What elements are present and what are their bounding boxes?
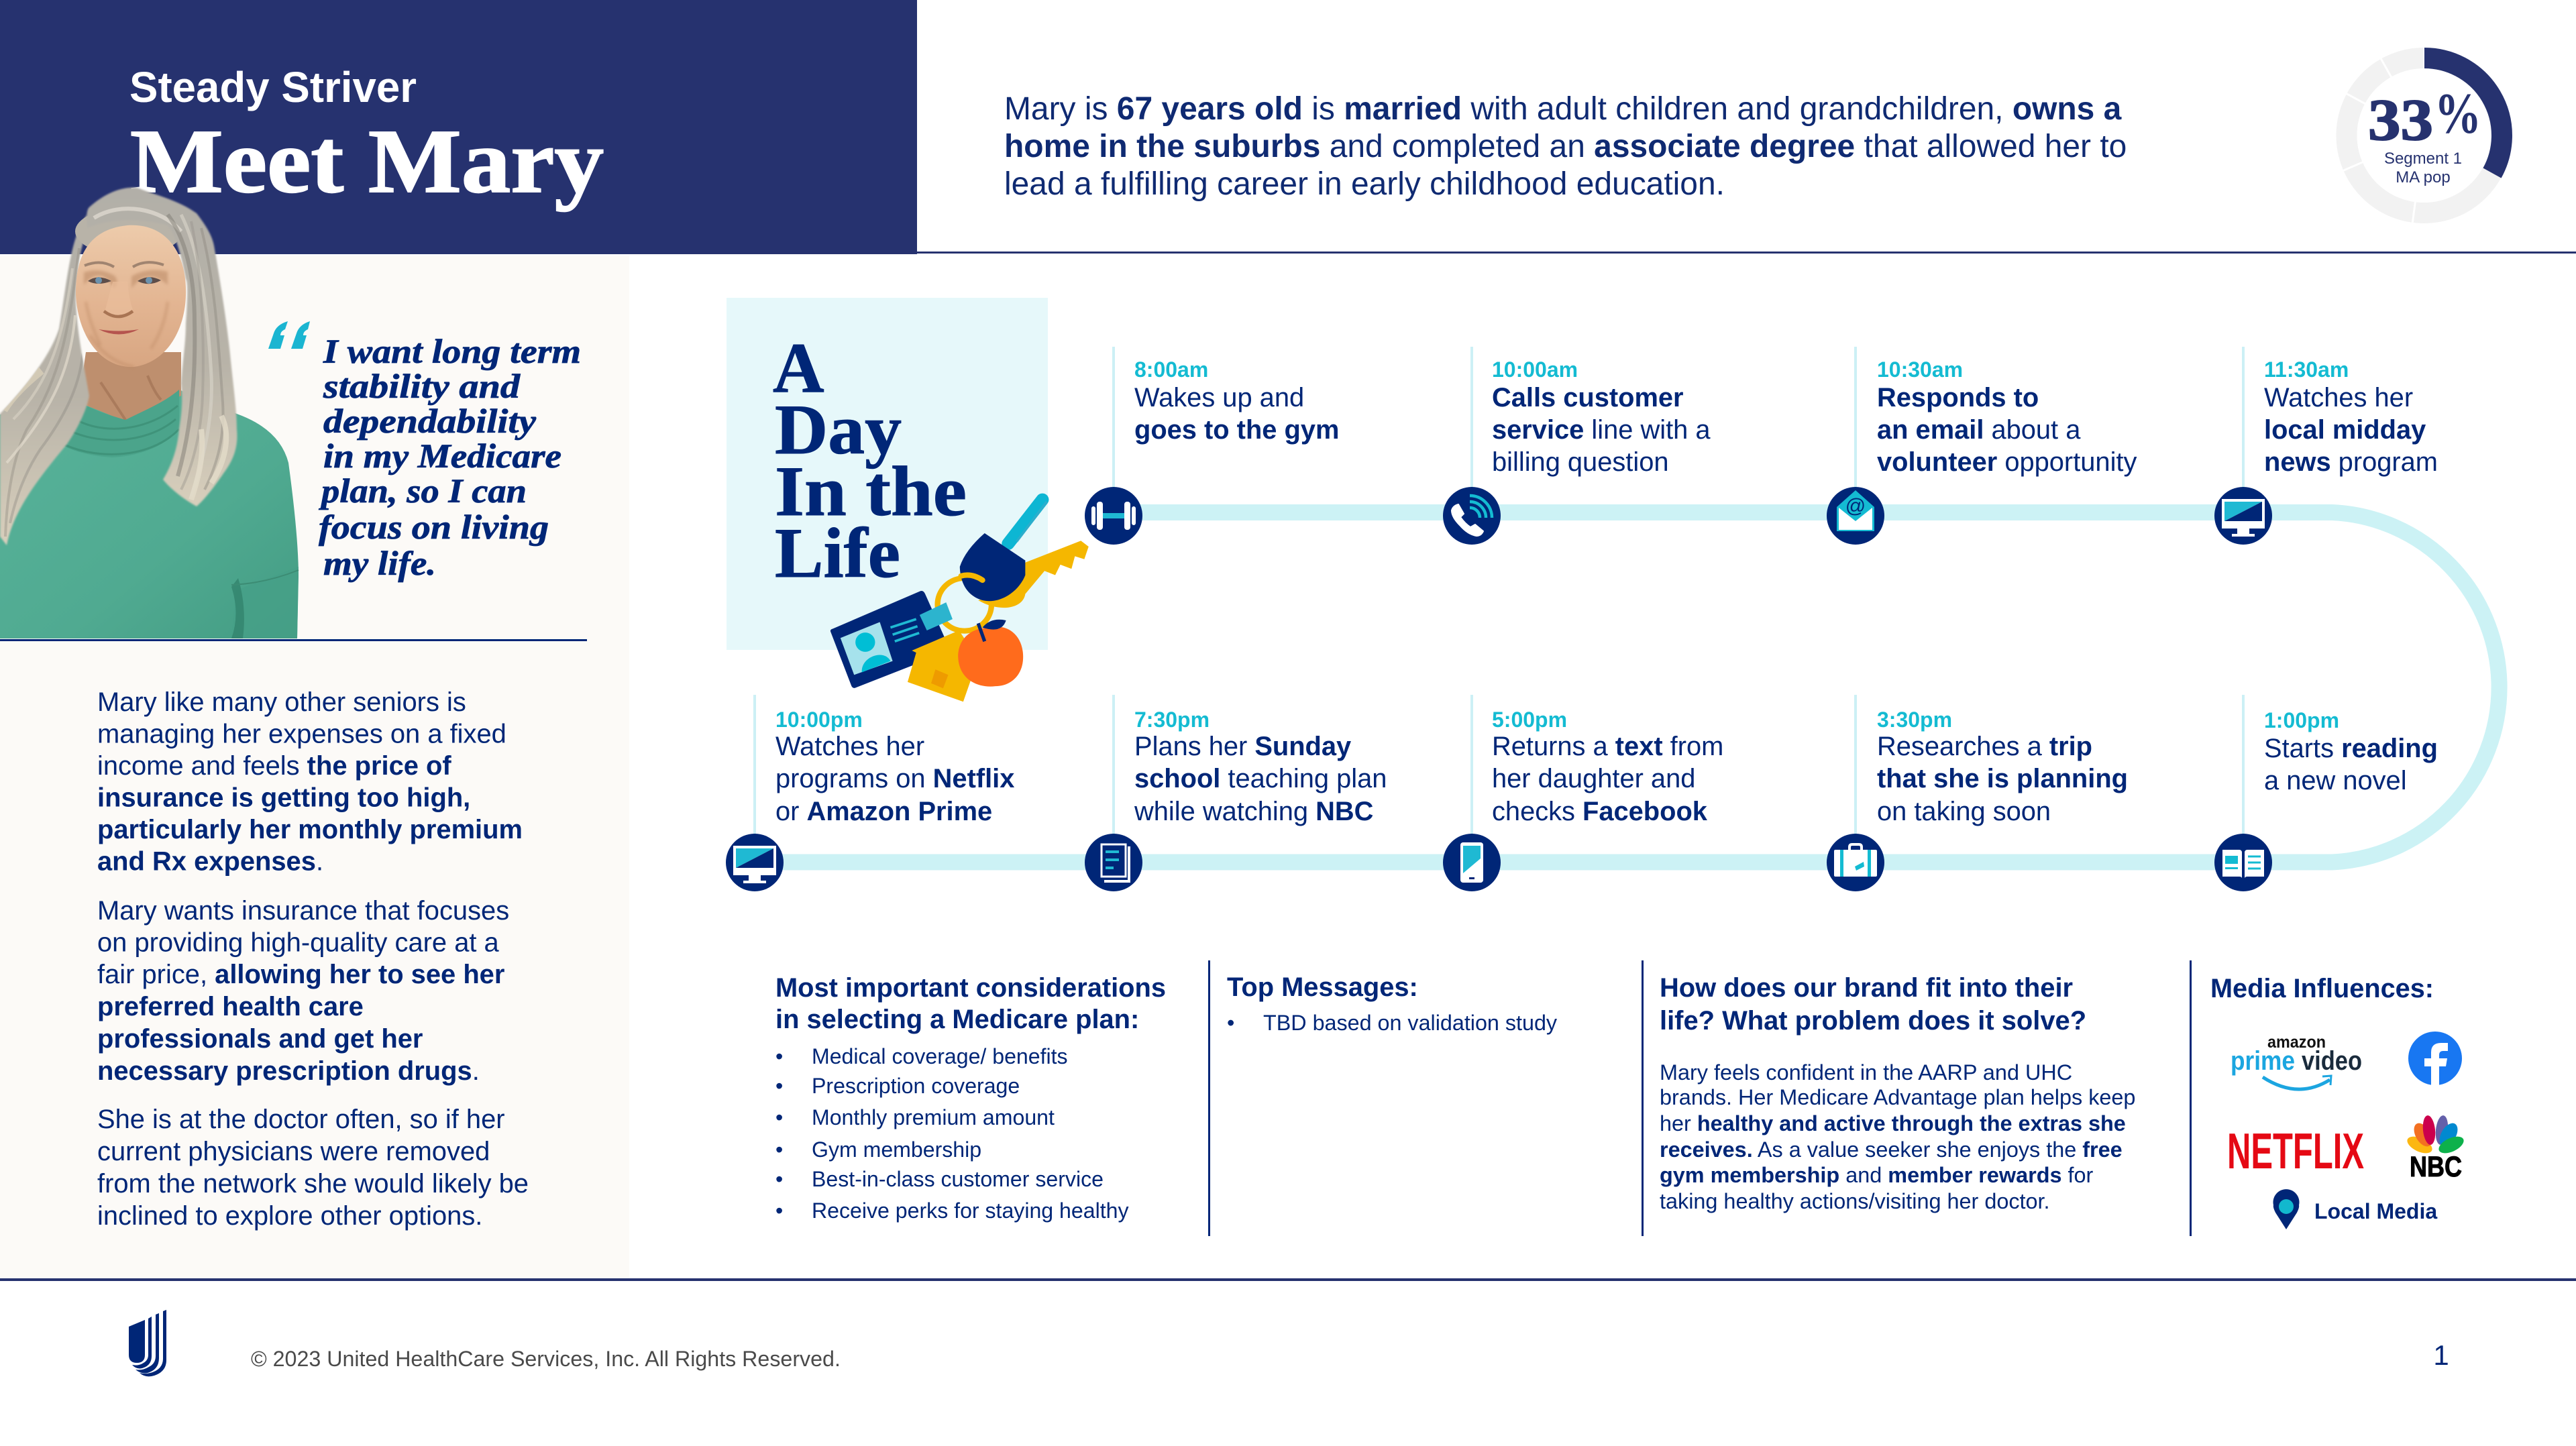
persona description: income and feels the price of xyxy=(97,751,451,781)
icon: email: @ xyxy=(1845,495,1866,517)
timeline entry: 10:30am: 10:30am xyxy=(1877,357,1963,382)
logo: amazon prime video: amazon xyxy=(2267,1033,2326,1052)
heading: Most important considerations xyxy=(775,973,1166,1003)
quote marks xyxy=(268,321,310,349)
bullet list: • xyxy=(775,1137,783,1162)
body copy: gym membership and member rewards for xyxy=(1660,1163,2094,1187)
bullet list: • xyxy=(775,1105,783,1129)
panel: brand fit xyxy=(1642,960,2135,1236)
timeline entry: 7:30pm: Plans her Sunday xyxy=(1134,732,1351,761)
portrait of Mary xyxy=(0,188,299,638)
bullet list: Best-in-class customer service xyxy=(812,1167,1104,1191)
timeline entry: 5:00pm: Returns a text from xyxy=(1492,732,1723,761)
logo: amazon prime video: video xyxy=(2302,1046,2362,1076)
section title: a day in the life xyxy=(773,329,967,592)
timeline entry: 1:00pm xyxy=(2214,708,2438,891)
timeline connector lines xyxy=(755,347,2243,835)
timeline entry: 10:00am: Calls customer xyxy=(1492,383,1684,412)
bullet list: • xyxy=(775,1044,783,1068)
body copy xyxy=(1660,1060,2135,1213)
icon: documents xyxy=(1085,834,1142,891)
message bullet: TBD based on validation study xyxy=(1263,1011,1558,1035)
timeline entry: 10:00pm: programs on Netflix xyxy=(775,764,1014,793)
timeline entry: 1:00pm: Starts reading xyxy=(2264,734,2438,763)
icon: monitor xyxy=(2214,487,2272,545)
timeline entry: 1:00pm: a new novel xyxy=(2264,766,2407,795)
timeline entry: 7:30pm xyxy=(1085,708,1387,891)
timeline entry: 10:00pm xyxy=(726,708,1014,891)
timeline entry: 3:30pm: Researches a trip xyxy=(1877,732,2092,761)
persona description: and Rx expenses. xyxy=(97,846,323,876)
timeline entry: 3:30pm: that she is planning xyxy=(1877,764,2128,793)
timeline entry: 8:00am: goes to the gym xyxy=(1134,415,1339,445)
logo: nbc: NBC xyxy=(2410,1151,2462,1183)
local media xyxy=(2273,1189,2437,1229)
intro paragraph: Mary is 67 years old is married with adult children and grandchildren, owns a xyxy=(1004,91,2122,127)
heading xyxy=(1660,973,2086,1036)
quote text: in my Medicare xyxy=(323,438,561,476)
bullet list: Prescription coverage xyxy=(812,1074,1020,1098)
heading: in selecting a Medicare plan: xyxy=(775,1005,1139,1034)
timeline entry: 11:30am: Watches her xyxy=(2264,383,2413,412)
timeline entry: 10:00am: 10:00am xyxy=(1492,357,1578,382)
quote text: my life. xyxy=(323,545,436,583)
persona description: inclined to explore other options. xyxy=(97,1201,482,1231)
panel: most important considerations xyxy=(775,973,1166,1223)
main title: Meet Mary xyxy=(130,111,604,212)
body copy: brands. Her Medicare Advantage plan helps keep xyxy=(1660,1085,2135,1109)
body copy: receives. As a value seeker she enjoys the free xyxy=(1660,1137,2123,1162)
timeline entry: 11:30am: local midday xyxy=(2264,415,2426,445)
timeline entry: 7:30pm: 7:30pm xyxy=(1134,708,1210,732)
bullet list: Monthly premium amount xyxy=(812,1105,1055,1129)
persona description: Mary wants insurance that focuses xyxy=(97,896,509,926)
divider xyxy=(1642,960,1644,1236)
timeline entry: 5:00pm: 5:00pm xyxy=(1492,708,1567,732)
icon: smartphone xyxy=(1443,834,1501,891)
timeline entry: 1:00pm: 1:00pm xyxy=(2264,708,2339,732)
timeline entry: 7:30pm: school teaching plan xyxy=(1134,764,1387,793)
timeline entry: 10:00pm: 10:00pm xyxy=(775,708,863,732)
persona description: current physicians were removed xyxy=(97,1137,490,1166)
timeline entry: 10:00am: service line with a xyxy=(1492,415,1711,445)
timeline entry: 10:30am: Responds to xyxy=(1877,383,2039,412)
quote text: dependability xyxy=(323,403,536,441)
intro paragraph: lead a fulfilling career in early childhood education. xyxy=(1004,166,1725,202)
logo: facebook xyxy=(2408,1032,2462,1085)
panel: media influences xyxy=(2190,960,2466,1236)
quote text: stability and xyxy=(323,368,521,406)
stat caption xyxy=(2384,150,2462,186)
divider xyxy=(1208,960,1210,1236)
bullet list: • xyxy=(775,1167,783,1191)
persona description: She is at the doctor often, so if her xyxy=(97,1105,505,1134)
bullet list: Medical coverage/ benefits xyxy=(812,1044,1068,1068)
intro paragraph xyxy=(1004,91,2127,202)
timeline entry: 11:30am: 11:30am xyxy=(2264,357,2349,382)
copyright: © 2023 United HealthCare Services, Inc. All Rights Reserved. xyxy=(251,1347,841,1371)
page number: 1 xyxy=(2433,1339,2449,1371)
bullet list: • xyxy=(775,1199,783,1223)
timeline entry: 7:30pm: while watching NBC xyxy=(1134,797,1373,826)
header rule xyxy=(917,252,2576,254)
panel: top messages xyxy=(1208,960,1558,1236)
icon: email xyxy=(1827,487,1884,545)
heading xyxy=(775,973,1166,1034)
timeline entry: 5:00pm: her daughter and xyxy=(1492,764,1695,793)
persona description: necessary prescription drugs. xyxy=(97,1056,480,1086)
timeline entry: 10:30am: an email about a xyxy=(1877,415,2081,445)
timeline entry: 11:30am: news program xyxy=(2264,447,2438,477)
persona description: from the network she would likely be xyxy=(97,1169,529,1199)
quote rule xyxy=(0,639,587,641)
icon: phone xyxy=(1443,487,1501,545)
footer logo xyxy=(129,1310,166,1376)
header band xyxy=(0,0,917,254)
persona description xyxy=(97,687,529,1231)
timeline track xyxy=(755,512,2500,863)
heading: Media Influences: xyxy=(2210,974,2434,1003)
timeline entry: 3:30pm: on taking soon xyxy=(1877,797,2051,826)
icon: television xyxy=(726,834,784,891)
stat caption: MA pop xyxy=(2396,168,2451,186)
timeline entry: 5:00pm: checks Facebook xyxy=(1492,797,1708,826)
logo: nbc xyxy=(2405,1115,2466,1183)
persona description: fair price, allowing her to see her xyxy=(97,960,504,989)
intro paragraph: home in the suburbs and completed an associate degree that allowed her to xyxy=(1004,129,2127,164)
timeline entry: 11:30am xyxy=(2214,357,2438,545)
icon: open book xyxy=(2214,834,2272,891)
quote text: focus on living xyxy=(319,509,549,547)
local media: Local Media xyxy=(2314,1199,2437,1223)
percent sign: % xyxy=(2434,81,2481,146)
persona description: insurance is getting too high, xyxy=(97,783,470,813)
icon: map pin xyxy=(2273,1189,2300,1229)
timeline entry: 10:30am: volunteer opportunity xyxy=(1877,447,2137,477)
persona description: Mary like many other seniors is xyxy=(97,687,466,717)
section title: a day in the life: A xyxy=(773,329,824,407)
icon: dumbbell xyxy=(1085,487,1142,545)
logo: amazon prime video xyxy=(2231,1033,2362,1089)
heading: How does our brand fit into their xyxy=(1660,973,2073,1003)
bullet list: Receive perks for staying healthy xyxy=(812,1199,1128,1223)
segment label: Steady Striver xyxy=(129,63,417,111)
timeline entry: 3:30pm xyxy=(1827,708,2128,891)
bullet list: • xyxy=(775,1074,783,1098)
timeline entry: 8:00am: 8:00am xyxy=(1134,357,1208,382)
timeline entry: 10:00pm: Watches her xyxy=(775,732,924,761)
bullet list xyxy=(775,1044,1128,1223)
persona description: managing her expenses on a fixed xyxy=(97,719,506,748)
panel: a day in the life xyxy=(727,298,1048,650)
heading: Top Messages: xyxy=(1227,972,1418,1002)
timeline entry: 8:00am xyxy=(1085,357,1339,545)
timeline entry: 10:30am xyxy=(1827,357,2137,545)
section title: a day in the life: Day xyxy=(775,390,902,469)
section title: a day in the life: In the xyxy=(775,452,967,531)
quote text xyxy=(319,333,581,583)
timeline entry: 8:00am: Wakes up and xyxy=(1134,383,1304,412)
illustration: key ring xyxy=(830,500,1089,702)
timeline entry: 10:00pm: or Amazon Prime xyxy=(775,797,992,826)
stat caption: Segment 1 xyxy=(2384,150,2462,168)
section title: a day in the life: Life xyxy=(775,514,900,592)
divider xyxy=(2190,960,2192,1236)
timeline entry: 3:30pm: 3:30pm xyxy=(1877,708,1952,732)
header title block xyxy=(129,63,604,212)
persona description: particularly her monthly premium xyxy=(97,815,523,844)
body copy: taking healthy actions/visiting her doctor. xyxy=(1660,1189,2050,1213)
message bullet: • xyxy=(1227,1011,1234,1035)
bullet list: Gym membership xyxy=(812,1137,981,1162)
persona description: on providing high-quality care at a xyxy=(97,928,500,958)
quote text: I want long term xyxy=(323,333,581,371)
donut stat: 33 percent xyxy=(2334,40,2502,229)
quote text: plan, so I can xyxy=(319,473,527,510)
timeline entry: 10:00am xyxy=(1443,357,1711,545)
timeline entry: 5:00pm xyxy=(1443,708,1723,891)
footer rule xyxy=(0,1278,2576,1281)
persona description: preferred health care xyxy=(97,992,364,1021)
timeline entry: 10:00am: billing question xyxy=(1492,447,1669,477)
icon: suitcase xyxy=(1827,834,1884,891)
logo: netflix: NETFLIX xyxy=(2227,1123,2364,1179)
heading: life? What problem does it solve? xyxy=(1660,1006,2086,1036)
body copy: her healthy and active through the extras she xyxy=(1660,1111,2126,1135)
logo: amazon prime video: prime xyxy=(2231,1046,2295,1076)
cream side panel xyxy=(0,256,629,1279)
body copy: Mary feels confident in the AARP and UHC xyxy=(1660,1060,2072,1084)
stat value: 33 xyxy=(2368,88,2433,153)
persona description: professionals and get her xyxy=(97,1024,423,1054)
